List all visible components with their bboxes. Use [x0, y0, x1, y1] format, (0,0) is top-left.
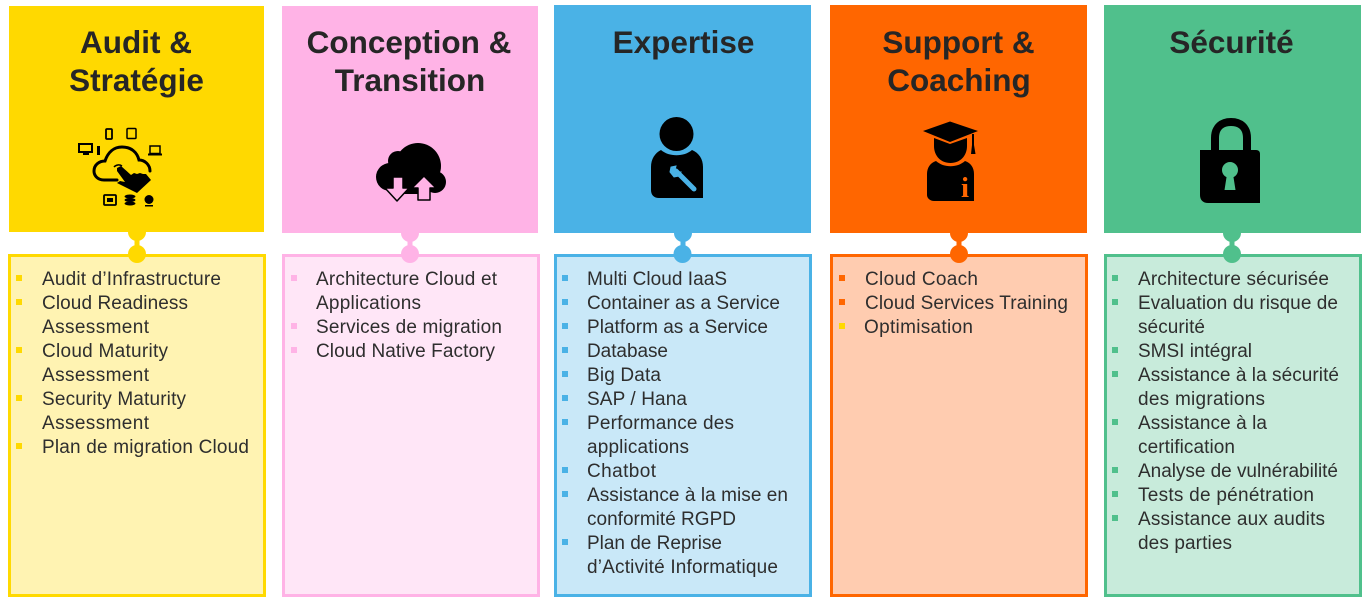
heading: Audit &: [80, 24, 192, 60]
icon: person with wrench: [651, 117, 703, 198]
panel: Expertise: [554, 5, 811, 596]
heading: Coaching: [887, 62, 1031, 98]
list: [562, 269, 788, 578]
heading: Support &: [882, 24, 1035, 60]
icon: cloud upload and download: [376, 143, 446, 201]
heading: [307, 24, 511, 98]
list: Services de migration: [316, 317, 502, 338]
list: [839, 269, 1068, 338]
list: Assessment: [42, 317, 150, 338]
list: Security Maturity: [42, 389, 186, 410]
heading: Expertise: [613, 24, 754, 60]
connector: [674, 224, 692, 249]
list: Multi Cloud IaaS: [587, 269, 727, 290]
list: Cloud Services Training: [865, 293, 1068, 314]
list: [291, 269, 502, 362]
list box: [1106, 256, 1360, 596]
list: Platform as a Service: [587, 317, 768, 338]
list: Big Data: [587, 365, 661, 386]
connector: [401, 224, 419, 249]
list box: [10, 256, 264, 596]
connector: [128, 223, 146, 248]
list: Cloud Readiness: [42, 293, 188, 314]
icon: padlock: [1200, 122, 1260, 203]
list: Audit d’Infrastructure: [42, 269, 221, 290]
icon: cloud with hand and devices: [79, 128, 162, 206]
list: Performance des: [587, 413, 734, 434]
list box: [284, 256, 538, 596]
panel: Audit & Stratégie: [9, 6, 264, 596]
panel: Conception & Transition: [282, 6, 538, 596]
list: Assistance à la mise en: [587, 485, 788, 506]
panel: Sécurité: [1104, 5, 1361, 596]
list: applications: [587, 437, 689, 458]
connector dot: [950, 245, 968, 263]
list: des parties: [1138, 533, 1232, 554]
list: Plan de migration Cloud: [42, 437, 249, 458]
list: Optimisation: [864, 317, 973, 338]
list box: [832, 256, 1086, 596]
connector dot: [674, 245, 692, 263]
list: Plan de Reprise: [587, 533, 722, 554]
heading: Transition: [335, 62, 485, 98]
connector dot: [401, 245, 419, 263]
list: Applications: [316, 293, 421, 314]
list: Architecture Cloud et: [316, 269, 498, 290]
list: Assistance aux audits: [1138, 509, 1325, 530]
header block: [9, 6, 264, 232]
list: Cloud Maturity: [42, 341, 168, 362]
list: Assistance à la sécurité: [1138, 365, 1339, 386]
list: Architecture sécurisée: [1138, 269, 1329, 290]
list: [16, 269, 249, 458]
list: Assessment: [42, 365, 150, 386]
heading: Stratégie: [69, 62, 204, 98]
connector: [950, 224, 968, 249]
connector dot: [128, 245, 146, 263]
list: d’Activité Informatique: [587, 557, 778, 578]
connector: [1223, 224, 1241, 249]
list: conformité RGPD: [587, 509, 736, 530]
list: Tests de pénétration: [1138, 485, 1314, 506]
list: des migrations: [1138, 389, 1265, 410]
list: [1112, 269, 1339, 554]
list: Chatbot: [587, 461, 657, 482]
list: Container as a Service: [587, 293, 780, 314]
list: Evaluation du risque de: [1138, 293, 1338, 314]
list: Cloud Native Factory: [316, 341, 496, 362]
header block: [1104, 5, 1361, 233]
list: Cloud Coach: [865, 269, 978, 290]
connector dot: [1223, 245, 1241, 263]
list: Assistance à la: [1138, 413, 1267, 434]
list: SMSI intégral: [1138, 341, 1252, 362]
list: Analyse de vulnérabilité: [1138, 461, 1338, 482]
list: Database: [587, 341, 668, 362]
icon: graduate with info: i: [961, 172, 969, 204]
heading: [69, 24, 204, 98]
heading: [882, 24, 1035, 98]
list: sécurité: [1138, 317, 1205, 338]
header block: [282, 6, 538, 233]
heading: Sécurité: [1169, 24, 1294, 60]
panel: Support & Coaching: [830, 5, 1087, 596]
list: certification: [1138, 437, 1235, 458]
header block: [830, 5, 1087, 233]
heading: Conception &: [307, 24, 511, 60]
list: SAP / Hana: [587, 389, 687, 410]
icon: graduate with info: [923, 122, 978, 204]
list: Assessment: [42, 413, 150, 434]
list box: [556, 256, 810, 596]
header block: [554, 5, 811, 233]
